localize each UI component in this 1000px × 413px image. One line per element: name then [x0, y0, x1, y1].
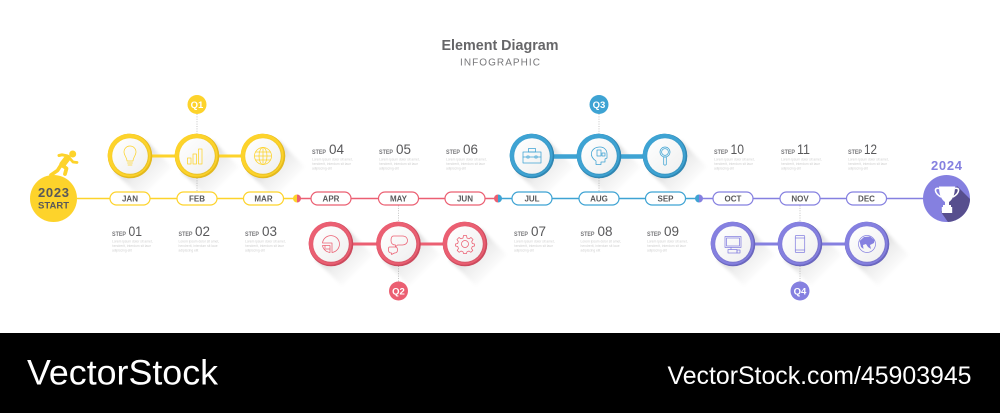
steps 07 to 09: Lorem ipsum dolor sit amet,: [514, 240, 555, 244]
steps 01 to 03: hendrerit, interdum sit laue: [178, 244, 218, 248]
steps 07 to 09: 09: [664, 224, 679, 239]
connector Q4: [733, 242, 867, 246]
steps 10 to 12: Lorem ipsum dolor sit amet,: [848, 158, 889, 162]
steps 04 to 06: adipiscing elit: [379, 166, 399, 170]
footer band: VectorStock: [27, 352, 218, 392]
month pills: SEP: [657, 194, 674, 204]
node: phone: [778, 222, 822, 266]
month pills: JUN: [457, 194, 473, 204]
steps 07 to 09: hendrerit, interdum sit laue: [647, 244, 686, 248]
title: INFOGRAPHIC: [460, 58, 540, 68]
title: Element Diagram: [442, 38, 558, 54]
panel: Q1: [108, 95, 305, 198]
badge Q3: Q3: [593, 100, 605, 111]
steps 01 to 03: adipiscing elit: [178, 248, 198, 252]
steps 01 to 03: adipiscing elit: [112, 248, 132, 252]
steps 10 to 12: STEP: [714, 149, 729, 156]
steps 07 to 09: Lorem ipsum dolor sit amet,: [580, 240, 621, 244]
long shadows Q1: [114, 140, 305, 198]
connector Q1: [130, 154, 263, 158]
badge Q4: Q4: [794, 286, 807, 298]
start node: 2023 start with runner: START: [38, 200, 69, 212]
month pills: MAR: [254, 194, 273, 204]
steps 07 to 09: STEP: [647, 231, 662, 238]
footer band: VectorStock.com/45903945: [668, 363, 972, 390]
steps 07 to 09: adipiscing elit: [647, 248, 667, 252]
steps 04 to 06: adipiscing elit: [446, 166, 466, 170]
start node: 2023 start with runner: 2023: [38, 185, 69, 200]
steps 10 to 12: adipiscing elit: [714, 166, 734, 170]
footer band: [0, 333, 1000, 413]
steps 10 to 12: adipiscing elit: [781, 166, 801, 170]
steps 10 to 12: 12: [864, 142, 877, 157]
node: gear: [443, 222, 487, 266]
steps 10 to 12: hendrerit, interdum sit laue: [781, 162, 820, 166]
steps 10 to 12: hendrerit, interdum sit laue: [848, 162, 887, 166]
month pills: [110, 192, 886, 205]
steps 04 to 06: hendrerit, interdum sit laue: [312, 162, 351, 166]
panel: Q2: [309, 222, 507, 300]
icon: runner: [51, 150, 77, 175]
month pills: NOV: [791, 194, 809, 204]
steps 01 to 03: STEP: [245, 231, 260, 238]
steps 07 to 09: 08: [598, 224, 612, 239]
badge Q1: Q1: [191, 100, 204, 111]
long shadows Q4: [717, 228, 909, 286]
node: desktop: [711, 222, 755, 266]
month pills: AUG: [590, 194, 608, 204]
steps 04 to 06: Lorem ipsum dolor sit amet,: [312, 158, 353, 162]
steps 01 to 03: STEP: [112, 231, 127, 238]
steps 04 to 06: Lorem ipsum dolor sit amet,: [379, 158, 420, 162]
panel: Q3: [510, 95, 707, 198]
steps 01 to 03: Lorem ipsum dolor sit amet,: [178, 240, 219, 244]
badge Q4: [790, 282, 810, 300]
steps 10 to 12: Lorem ipsum dolor sit amet,: [714, 158, 755, 162]
steps 01 to 03: adipiscing elit: [245, 248, 265, 252]
steps 10 to 12: [714, 142, 889, 170]
month pills: JUL: [524, 194, 540, 204]
timeline line: [77, 198, 924, 200]
steps 07 to 09: hendrerit, interdum sit laue: [514, 244, 553, 248]
connector Q2: [331, 242, 465, 246]
badge Q2: [389, 282, 408, 300]
end node: 2024 trophy: [923, 161, 970, 222]
node: head: [577, 134, 621, 178]
steps 01 to 03: Lorem ipsum dolor sit amet,: [245, 240, 286, 244]
steps 07 to 09: Lorem ipsum dolor sit amet,: [647, 240, 688, 244]
steps 01 to 03: 03: [262, 224, 277, 239]
month pills: JAN: [122, 194, 138, 204]
long shadows Q2: [315, 228, 507, 286]
steps 04 to 06: [312, 142, 487, 170]
steps 01 to 03: Lorem ipsum dolor sit amet,: [112, 240, 153, 244]
steps 04 to 06: adipiscing elit: [312, 166, 332, 170]
month pills: DEC: [858, 194, 875, 204]
steps 07 to 09: [514, 224, 688, 252]
steps 10 to 12: Lorem ipsum dolor sit amet,: [781, 158, 822, 162]
steps 04 to 06: 04: [329, 142, 344, 157]
month pills: APR: [323, 194, 340, 204]
month pills: MAY: [390, 194, 408, 204]
badge Q1: [188, 95, 206, 114]
steps 07 to 09: STEP: [514, 231, 529, 238]
steps 07 to 09: hendrerit, interdum sit laue: [580, 244, 620, 248]
steps 04 to 06: 06: [463, 142, 478, 157]
steps 04 to 06: STEP: [312, 149, 327, 156]
node: bulb: [108, 134, 152, 178]
steps 07 to 09: STEP: [580, 231, 595, 238]
steps 10 to 12: hendrerit, interdum sit laue: [714, 162, 753, 166]
quarter dots on timeline: [293, 194, 703, 202]
node: magnifier: [643, 134, 687, 178]
dotted quarter connectors: [197, 114, 800, 282]
start node: 2023 start with runner: [30, 150, 77, 222]
month pills: FEB: [189, 194, 205, 204]
node: briefcase: [510, 134, 554, 178]
end node: 2024 trophy: 2024: [931, 158, 963, 173]
node: chat: [376, 222, 421, 266]
badge Q2: Q2: [392, 286, 405, 298]
steps 01 to 03: [112, 224, 286, 252]
node: pie: [309, 222, 353, 266]
steps 04 to 06: hendrerit, interdum sit laue: [379, 162, 418, 166]
steps 01 to 03: hendrerit, interdum sit laue: [112, 244, 151, 248]
connector Q3: [532, 154, 665, 159]
steps 04 to 06: STEP: [379, 149, 394, 156]
steps 10 to 12: STEP: [781, 149, 796, 156]
panel: Q4: [711, 222, 909, 300]
steps 10 to 12: 10: [730, 142, 744, 157]
node: bars: [175, 134, 219, 178]
steps 07 to 09: adipiscing elit: [580, 248, 600, 252]
node: world: [845, 222, 889, 266]
steps 07 to 09: adipiscing elit: [514, 248, 534, 252]
steps 04 to 06: STEP: [446, 149, 461, 156]
steps 10 to 12: adipiscing elit: [848, 166, 868, 170]
node: globe: [241, 134, 285, 178]
steps 07 to 09: 07: [531, 224, 546, 239]
steps 01 to 03: STEP: [178, 231, 193, 238]
steps 04 to 06: hendrerit, interdum sit laue: [446, 162, 485, 166]
steps 01 to 03: hendrerit, interdum sit laue: [245, 244, 284, 248]
steps 01 to 03: 01: [128, 224, 142, 239]
steps 10 to 12: 11: [797, 142, 810, 157]
steps 10 to 12: STEP: [848, 149, 863, 156]
icon: trophy: [935, 186, 959, 213]
month pills: OCT: [725, 194, 742, 204]
badge Q3: [590, 95, 608, 114]
steps 04 to 06: Lorem ipsum dolor sit amet,: [446, 158, 487, 162]
title: [442, 38, 558, 68]
long shadows Q3: [516, 140, 707, 198]
steps 04 to 06: 05: [396, 142, 411, 157]
steps 01 to 03: 02: [195, 224, 210, 239]
